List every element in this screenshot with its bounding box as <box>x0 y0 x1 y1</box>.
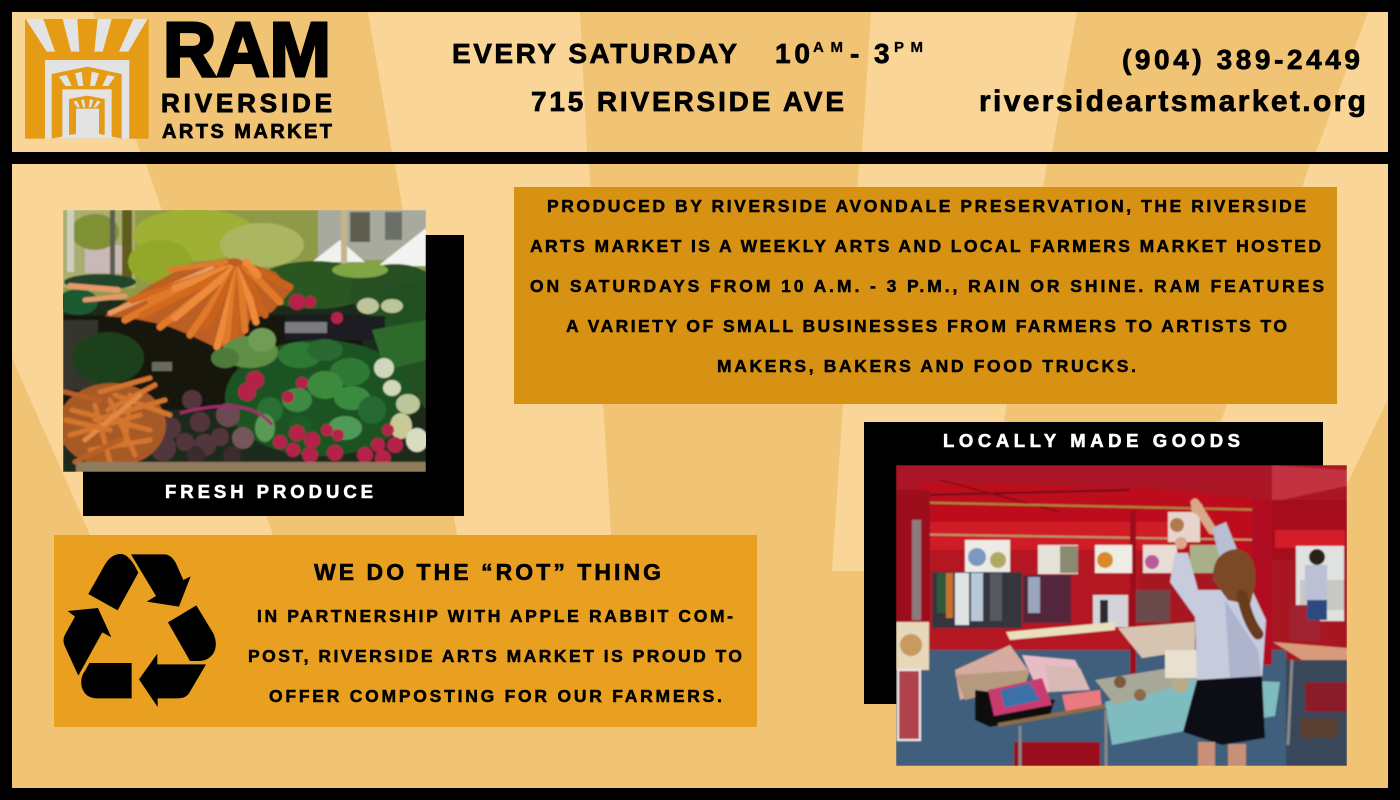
panel: description of the market <box>514 187 1337 404</box>
header text: schedule and address: 715 RIVERSIDE AVE <box>531 86 844 117</box>
header text: phone and website: riversideartsmarket.org <box>979 85 1366 118</box>
text: composting partnership <box>248 606 742 706</box>
header text: schedule and address: 3 <box>874 38 890 69</box>
panel: description of the market: MAKERS, BAKERS AND FOOD TRUCKS. <box>717 356 1136 376</box>
header text: schedule and address: 10 <box>775 38 810 69</box>
panel: description of the market: PRODUCED BY RIVERSIDE AVONDALE PRESERVATION, THE RIVERSIDE <box>547 196 1306 216</box>
logo wordmark: Riverside: RIVERSIDE <box>161 88 332 118</box>
caption: locally made goods: LOCALLY MADE GOODS <box>943 430 1240 451</box>
text: composting partnership: POST, RIVERSIDE ARTS MARKET IS PROUD TO <box>248 646 742 666</box>
logo wordmark: RAM: RAM <box>163 7 331 93</box>
header text: schedule and address: EVERY SATURDAY <box>452 38 737 69</box>
text: composting partnership: OFFER COMPOSTING FOR OUR FARMERS. <box>269 686 722 706</box>
header text: phone and website <box>979 44 1366 118</box>
panel: description of the market: ARTS MARKET IS A WEEKLY ARTS AND LOCAL FARMERS MARKET HOSTED <box>530 236 1321 256</box>
black caption card <box>83 235 464 516</box>
panel: main background <box>12 164 1388 788</box>
heading: we do the rot thing: WE DO THE “ROT” THING <box>314 559 661 585</box>
black caption card <box>864 422 1323 704</box>
header text: phone and website: (904) 389-2449 <box>1122 44 1360 75</box>
icon: market arch with sun rays <box>25 19 149 139</box>
panel: header band <box>12 12 1388 152</box>
caption: fresh produce: FRESH PRODUCE <box>165 481 373 502</box>
icon: recycling symbol <box>63 554 216 707</box>
panel: locally made goods <box>864 422 1347 766</box>
header text: schedule and address: PM <box>894 39 923 56</box>
panel: fresh produce <box>58 209 464 516</box>
header text: schedule and address <box>452 38 923 117</box>
text: composting partnership: IN PARTNERSHIP WITH APPLE RABBIT COM- <box>257 606 733 626</box>
panel: description of the market: A VARIETY OF SMALL BUSINESSES FROM FARMERS TO ARTISTS TO <box>566 316 1287 336</box>
logo: Riverside Arts Market <box>25 7 332 143</box>
header text: schedule and address: AM <box>813 39 843 56</box>
photo: vegetables on a market stall <box>58 209 440 472</box>
logo wordmark: Arts Market: ARTS MARKET <box>162 121 332 143</box>
panel: composting callout <box>54 535 757 727</box>
photo: vendor hanging prints in a red tent <box>896 465 1347 766</box>
panel: description of the market: ON SATURDAYS FROM 10 A.M. - 3 P.M., RAIN OR SHINE. RAM FEATURES <box>530 276 1324 296</box>
header text: schedule and address: - <box>850 38 859 69</box>
